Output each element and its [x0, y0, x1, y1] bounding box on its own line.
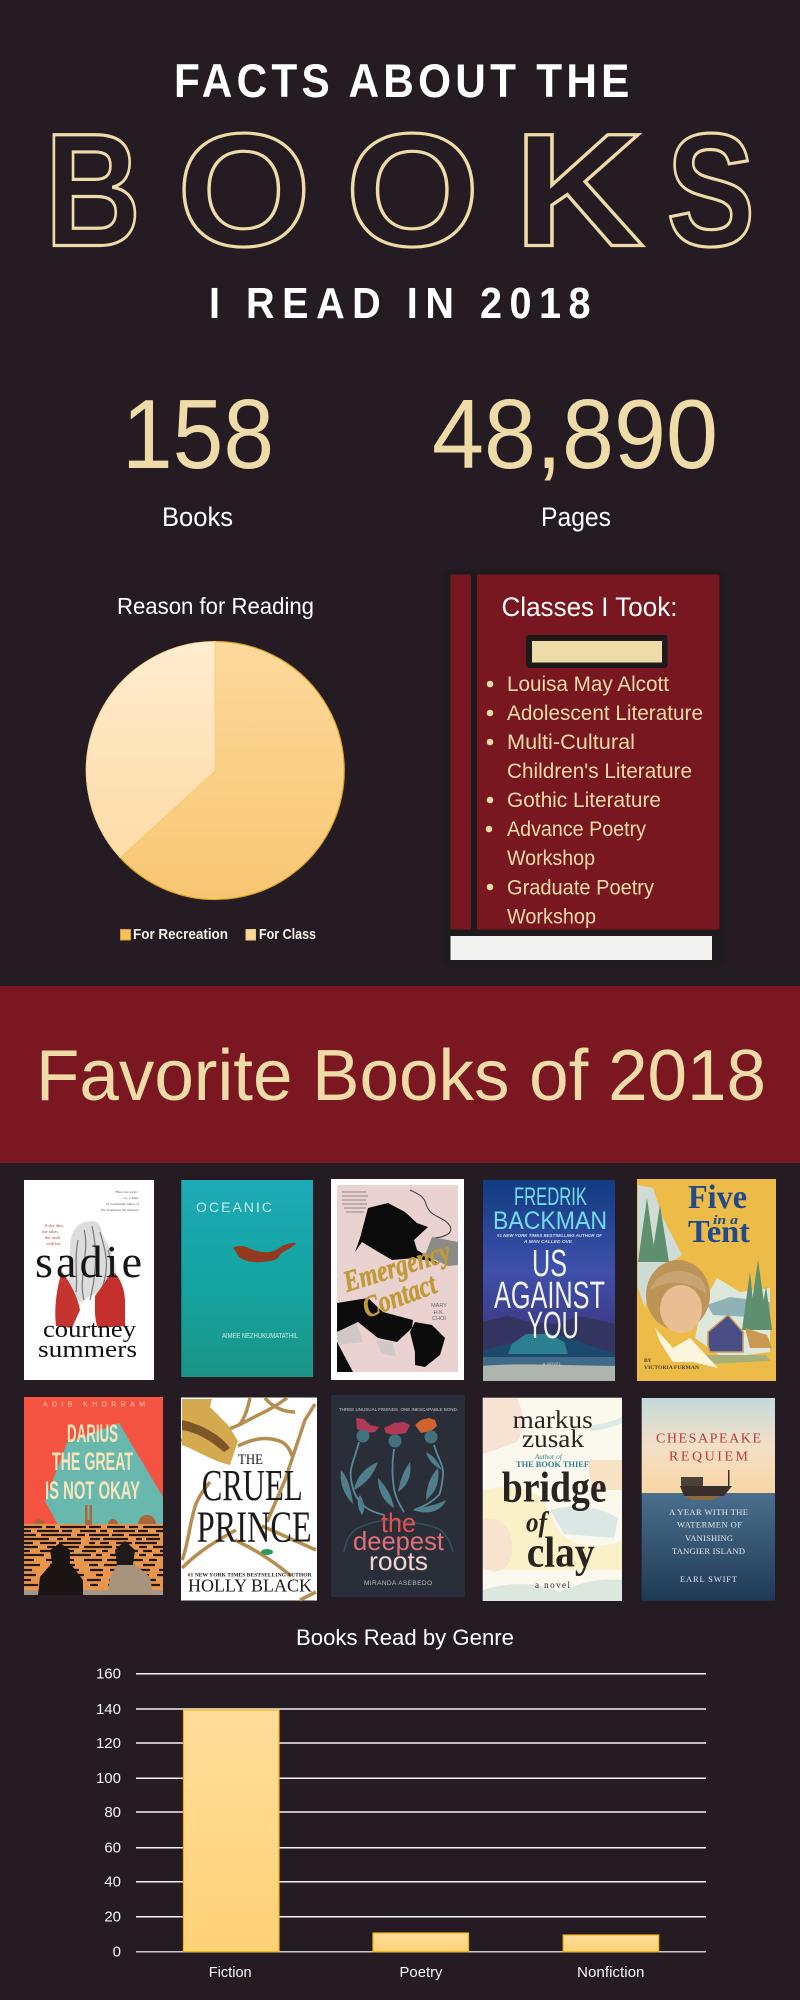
book cover: emergency contact — [331, 1179, 464, 1380]
book cover: sadie: The Woman in the Window — [100, 1208, 139, 1212]
heading: books outline: K — [514, 100, 644, 280]
classes heading: Classes I Took: — [502, 592, 678, 622]
axis labels: 0 — [113, 1944, 121, 1960]
bar: nonfiction — [563, 1935, 659, 1952]
classes list — [486, 673, 703, 928]
axis labels: 140 — [96, 1701, 121, 1718]
book cover: the cruel prince: HOLLY BLACK — [188, 1576, 312, 1596]
heading: books outline: S — [666, 100, 755, 280]
axis labels: 20 — [104, 1908, 121, 1926]
book cover: chesapeake requiem — [642, 1398, 775, 1601]
book cover — [477, 574, 720, 930]
book cover: us against you: A NOVEL — [543, 1362, 561, 1366]
classes list: Children's Literature — [507, 760, 692, 783]
book cover: the cruel prince: PRINCE — [197, 1503, 312, 1552]
bar: poetry — [373, 1933, 468, 1952]
book cover: five in a tent: BY — [644, 1358, 652, 1364]
book cover: sadie: "Blew me away." — [115, 1190, 140, 1194]
axis labels: 40 — [104, 1874, 121, 1890]
classes list: Louisa May Alcott — [507, 673, 669, 696]
heading: books outline: O — [346, 100, 480, 280]
book cover: emergency contact: CHOI — [432, 1316, 446, 1322]
category labels: Fiction — [209, 1964, 252, 1981]
heading: i read in 2018: I READ IN 2018 — [209, 278, 591, 327]
bar: fiction — [184, 1710, 279, 1952]
panel: classes book — [444, 570, 724, 966]
book cover: sadie: the truth — [45, 1235, 61, 1240]
book cover: the deepest roots — [331, 1395, 465, 1597]
book cover: us against you: FREDRIK — [514, 1183, 587, 1211]
category labels — [209, 1964, 644, 1981]
classes list: Graduate Poetry — [507, 876, 654, 900]
stat: books: 158 — [122, 379, 274, 489]
stat: pages: 48,890 — [432, 379, 718, 489]
book cover: bridge of clay: a novel — [535, 1580, 570, 1590]
book cover: sadie: #1 bestselling author of — [106, 1202, 140, 1206]
book cover: bridge of clay: clay — [527, 1530, 595, 1577]
book cover: oceanic: AIMEE NEZHUKUMATATHIL — [222, 1333, 298, 1340]
book cover: bridge of clay: Author of — [534, 1453, 563, 1461]
heading: facts about the: FACTS ABOUT THE — [174, 56, 629, 108]
stat: pages — [432, 379, 718, 532]
book cover: bridge of clay — [483, 1398, 622, 1601]
book cover: oceanic: OCEANIC — [196, 1199, 272, 1215]
book cover: chesapeake requiem: TANGIER ISLAND — [672, 1546, 745, 1556]
classes list: Workshop — [507, 906, 596, 928]
book cover: us against you: #1 NEW YORK TIMES BESTSELLING AUTHOR OF — [497, 1233, 602, 1238]
book cover: darius the great is not okay — [24, 1397, 163, 1595]
slice: for recreation — [86, 642, 215, 858]
book cover: sadie — [24, 1180, 154, 1380]
bar chart: books read by genre — [96, 1625, 706, 1981]
book cover: sadie: if she dies, — [45, 1223, 64, 1229]
book cover: the cruel prince: CRUEL — [202, 1461, 303, 1510]
heading: books outline: O — [177, 100, 311, 280]
heading: books outline: B — [45, 100, 141, 280]
book cover: the deepest roots: deepest — [353, 1526, 445, 1556]
book cover: bridge of clay: THE BOOK THIEF — [516, 1460, 589, 1469]
book cover: sadie: —A. J. Finn, — [120, 1196, 139, 1201]
book cover: the cruel prince: #1 NEW YORK TIMES BESTSELLING AUTHOR — [188, 1573, 313, 1579]
book cover: emergency contact: MARY — [431, 1303, 447, 1309]
book cover: five in a tent: VICTORIA FURMAN — [644, 1365, 699, 1371]
book cover: five in a tent — [637, 1179, 776, 1381]
book cover: bridge of clay: bridge — [502, 1465, 607, 1512]
book cover: chesapeake requiem: A YEAR WITH THE — [669, 1507, 748, 1517]
book cover: emergency contact: H.K. — [434, 1310, 445, 1316]
book cover: sadie: sadie — [35, 1236, 142, 1287]
book cover: the cruel prince: THE — [238, 1452, 263, 1468]
title plate — [526, 635, 668, 668]
book cover: us against you: A MAN CALLED OVE — [523, 1239, 573, 1244]
book cover: darius the great is not okay: THE GREAT — [52, 1448, 133, 1476]
book cover: darius the great is not okay: ADIB KHORRAM — [43, 1402, 145, 1409]
classes list: Gothic Literature — [507, 789, 661, 812]
book cover: sadie: she takes — [42, 1229, 58, 1234]
classes list: Multi-Cultural — [507, 731, 635, 754]
axis labels: 60 — [104, 1840, 121, 1856]
title — [45, 56, 755, 327]
book cover: the deepest roots: roots — [369, 1546, 428, 1576]
book cover: five in a tent: Tent — [688, 1213, 750, 1249]
book cover: chesapeake requiem: REQUIEM — [669, 1450, 749, 1465]
axis labels: 120 — [96, 1735, 121, 1752]
book cover: the deepest roots: the — [381, 1508, 416, 1538]
book spine — [450, 574, 471, 930]
stat: books: Books — [162, 502, 233, 532]
book cover: oceanic — [181, 1180, 313, 1377]
book cover: chesapeake requiem: WATERMEN OF — [677, 1520, 742, 1530]
axis labels: 80 — [104, 1804, 121, 1821]
book cover: us against you: YOU — [527, 1305, 579, 1347]
classes list: Workshop — [507, 847, 595, 870]
pie title: Reason for Reading — [117, 593, 314, 619]
category labels: Nonfiction — [577, 1964, 644, 1981]
book cover: bridge of clay: of — [526, 1508, 549, 1539]
book pages — [450, 936, 712, 960]
book cover: emergency contact: Emergency — [339, 1235, 455, 1299]
category labels: Poetry — [400, 1964, 443, 1981]
legend: For Recreation — [133, 926, 228, 943]
classes list: Advance Poetry — [507, 818, 646, 841]
heading: books outline — [45, 100, 755, 280]
pie chart: reason for reading — [86, 593, 344, 943]
book cover: chesapeake requiem: VANISHING — [685, 1533, 733, 1543]
book cover: darius the great is not okay: DARIUS — [67, 1420, 118, 1448]
book cover: sadie: courtney — [43, 1317, 136, 1343]
book cover: chesapeake requiem: EARL SWIFT — [680, 1574, 738, 1584]
banner: favorite books: Favorite Books of 2018 — [36, 1036, 766, 1116]
book cover: chesapeake requiem: CHESAPEAKE — [656, 1432, 761, 1447]
legend — [120, 926, 316, 943]
book cover: darius the great is not okay: IS NOT OKAY — [45, 1477, 140, 1505]
legend: For Class — [259, 926, 316, 943]
book cover: bridge of clay: markus — [513, 1407, 593, 1434]
book cover: the deepest roots: MIRANDA ASEBEDO — [364, 1580, 432, 1587]
classes list: Adolescent Literature — [507, 702, 703, 725]
chart title: Books Read by Genre — [296, 1625, 514, 1650]
book cover: the deepest roots: THREE UNUSUAL FRIENDS. ONE INESCAPABLE BOND. — [339, 1407, 458, 1413]
book cover: us against you — [483, 1180, 615, 1381]
axis labels: 160 — [96, 1666, 121, 1682]
axis labels — [96, 1666, 121, 1960]
axis labels: 100 — [96, 1770, 121, 1787]
book cover: the cruel prince — [181, 1398, 317, 1600]
book cover: bridge of clay: zusak — [522, 1426, 585, 1453]
stat: pages: Pages — [541, 502, 611, 532]
slice: for class — [120, 641, 344, 899]
book cover: emergency contact: Contact — [358, 1267, 442, 1325]
book cover: sadie: summers — [38, 1337, 137, 1363]
book cover: five in a tent: Five — [688, 1179, 747, 1216]
banner: favorite books — [0, 986, 800, 1163]
book cover: five in a tent: in a — [713, 1212, 739, 1227]
book cover: us against you: US — [532, 1243, 567, 1285]
stat: books — [122, 379, 274, 532]
book cover: us against you: BACKMAN — [493, 1207, 607, 1235]
book cover: us against you: AGAINST — [494, 1275, 605, 1317]
book cover: sadie: with her — [46, 1241, 61, 1246]
